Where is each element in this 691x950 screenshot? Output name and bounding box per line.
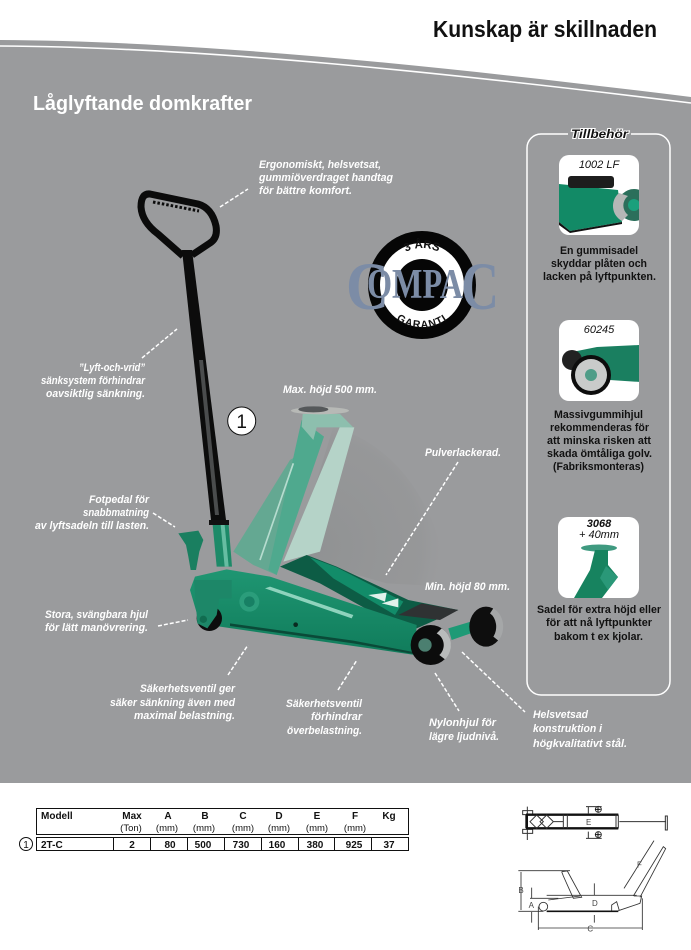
text: 3068: Sadel för extra höjd eller [537,604,662,616]
specification table: F [352,811,358,822]
callout: safety valve lowering: Säkerhetsventil ger [140,683,236,695]
specification table: (mm) [268,823,290,834]
text: 1002 LF: lacken på lyftpunkten. [543,271,656,283]
logo: Compac 3 års garanti: GARANTI [398,314,446,328]
text: 60245: Massivgummihjul [554,409,643,421]
castor wheel [197,606,222,631]
specification table: 2 [129,840,135,851]
callout: safety valve overload: förhindrar [311,711,363,723]
specification table: 500 [195,840,212,851]
specification table: B [201,811,209,822]
specification table [36,808,408,851]
specification table: Modell [41,811,73,822]
specification table: (mm) [232,823,254,834]
specification table: (mm) [193,823,215,834]
specification table: 160 [269,840,286,851]
text: 60245: skada ömtåliga golv. [547,448,652,460]
accessory 1002 LF: 1002 LF [579,159,620,171]
technical drawing: side view: F [637,860,642,869]
specification table: (Ton) [120,823,142,834]
logo: Compac 3 års garanti: C [461,248,499,324]
accessory 3068 [558,517,639,598]
row marker 1: 1 [23,840,29,851]
arrow marking [368,593,398,607]
text: 60245 [547,409,652,473]
text: 3068: bakom t ex kjolar. [554,631,643,643]
model marker 1 [228,407,256,435]
text: 60245: att minska risken att [547,435,651,447]
callout: nylon wheels: Nylonhjul för [429,717,497,729]
callout: foot pedal: av lyftsadeln till lasten. [35,520,149,532]
specification table: 730 [233,840,250,851]
pump column [213,525,232,567]
specification table: 37 [383,840,395,851]
specification table: (mm) [344,823,366,834]
callout: powder coated: Pulverlackerad. [425,447,501,459]
callout: safety valve overload [286,660,363,737]
accessory 1002 LF [559,155,639,235]
callout: castors: för lätt manövrering. [45,622,148,634]
motion blur of lift arm [293,427,448,587]
technical drawing: side view [518,841,666,933]
accessory 60245: 60245 [584,324,615,336]
text: 1002 LF: En gummisadel [560,245,638,257]
specification table: (mm) [306,823,328,834]
text: 1002 LF [543,245,656,283]
rear wheel [448,618,485,640]
specification table: 2T-C [41,840,63,851]
logo: Compac 3 års garanti [346,231,499,339]
technical drawing: top view [523,806,667,840]
text: 1002 LF: skyddar plåten och [551,258,647,270]
specification table: 925 [346,840,363,851]
row marker 1 [20,838,32,851]
callout: lowering system: oavsiktlig sänkning. [46,388,145,400]
specification table: C [239,811,247,822]
callout: handle: för bättre komfort. [259,185,352,197]
specification table: 80 [164,840,176,851]
callout: nylon wheels [429,673,499,743]
logo: Compac 3 års garanti: OMPA [367,262,464,308]
callout: welded construction: Helsvetsad [533,709,588,721]
top plate [280,555,458,628]
technical drawing: top view: E [586,818,591,827]
callout: castors: Stora, svängbara hjul [45,609,149,621]
accessory 60245 [559,320,640,401]
photo: low-lift trolley jack [178,406,503,665]
specification table: E [314,811,321,822]
callout: foot pedal: snabbmatning [83,507,149,519]
text: 60245: (Fabriksmonteras) [553,461,644,473]
tread pad [398,603,458,620]
callout: lowering system: sänksystem förhindrar [41,375,146,387]
callout: welded construction: högkvalitativt stål. [533,738,627,750]
callout: safety valve lowering: maximal belastning. [134,710,235,722]
lift arm [233,450,307,575]
callout: lowering system [41,329,177,400]
saddle [302,414,353,440]
callout: powder coated [386,447,501,575]
callout: castors [45,609,188,634]
callout: min height: Min. höjd 80 mm. [425,581,510,593]
heading: Låglyftande domkrafter [33,92,252,115]
callout: lowering system: ”Lyft-och-vrid” [79,362,145,374]
logo: Compac 3 års garanti: 3 ÅRS [404,238,440,251]
text: 60245: rekommenderas för [550,422,650,434]
callout: welded construction [462,652,627,750]
specification table: (mm) [156,823,178,834]
grey background panel [0,40,691,783]
specification table: A [164,811,172,822]
logo: Compac 3 års garanti: C [346,248,389,324]
technical drawing: side view: A [529,901,535,910]
specification table: Kg [382,811,396,822]
callout: safety valve lowering: säker sänkning även med [110,697,235,709]
technical drawing: side view: D [592,899,598,908]
accessory 3068: 3068 [587,518,612,530]
accessories heading: Tillbehör [571,127,629,141]
callout: foot pedal: Fotpedal för [89,494,150,506]
title: Kunskap är skillnaden [433,16,657,42]
specification table: Max [122,811,142,822]
panel: accessories [527,127,670,695]
callout: handle: gummiöverdraget handtag [258,172,393,184]
foot pedal [178,531,203,570]
text: 3068: för att nå lyftpunkter [546,617,653,629]
callout: nylon wheels: lägre ljudnivå. [429,731,499,743]
callout: handle: Ergonomiskt, helsvetsat, [259,159,381,171]
callout: max height: Max. höjd 500 mm. [283,384,377,396]
specification table: D [275,811,283,822]
text: 3068 [537,604,662,643]
specification table: 380 [307,840,324,851]
main frame [190,569,417,655]
callout: foot pedal [35,494,175,532]
callout: safety valve lowering [110,645,248,722]
accessory 3068: + 40mm [579,529,619,541]
callout: safety valve overload: överbelastning. [287,725,362,737]
callout: safety valve overload: Säkerhetsventil [286,698,363,710]
callout: handle [220,159,393,207]
handle [141,194,229,525]
technical drawing: side view: C [587,924,593,933]
technical drawing: side view: B [518,886,524,895]
model marker 1: 1 [236,412,247,433]
front wheel [411,625,451,665]
callout: welded construction: konstruktion i [533,723,603,735]
